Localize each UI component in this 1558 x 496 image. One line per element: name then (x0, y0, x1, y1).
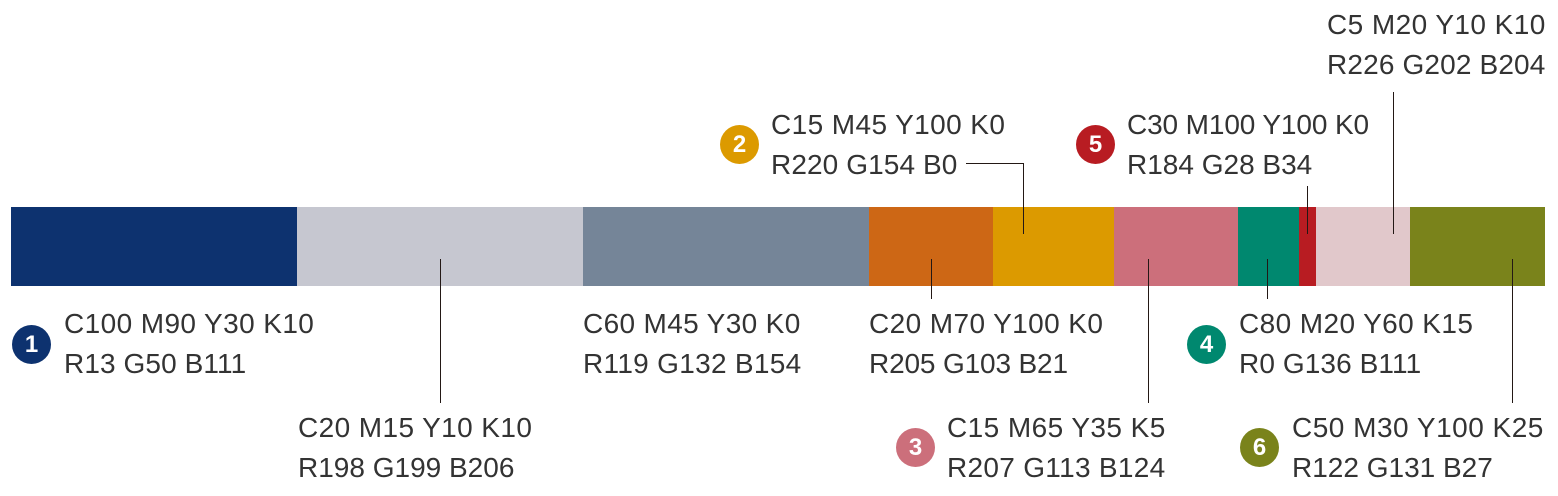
swatch: amber (993, 207, 1114, 286)
swatch: olive (1410, 207, 1545, 286)
swatch: light gray (297, 207, 583, 286)
label: slate values (583, 308, 802, 379)
label: amber values: R220 G154 B0 (771, 149, 957, 180)
leader line: red (1307, 186, 1308, 234)
badge 1 (12, 325, 51, 364)
label: pale pink values: C5 M20 Y10 K10 (1327, 9, 1546, 40)
label: light gray values (298, 412, 532, 483)
label: navy values: R13 G50 B111 (64, 348, 246, 379)
label: pale pink values (1327, 9, 1546, 80)
label: red values: C30 M100 Y100 K0 (1127, 109, 1369, 140)
label: amber values: C15 M45 Y100 K0 (771, 109, 1005, 140)
badge 4 (1187, 325, 1226, 364)
label: navy values: C100 M90 Y30 K10 (64, 308, 314, 339)
label: olive values: C50 M30 Y100 K25 (1292, 412, 1544, 443)
label: rose values (947, 412, 1166, 483)
leader line: light gray (440, 259, 441, 403)
badge 5: 5 (1089, 131, 1102, 158)
badge 6: 6 (1253, 434, 1266, 461)
label: green values (1239, 308, 1473, 379)
badge 1: 1 (25, 331, 38, 358)
leader line: green (1267, 259, 1268, 299)
badge 3: 3 (909, 434, 922, 461)
swatch: pale pink (1316, 207, 1410, 286)
label: orange values: C20 M70 Y100 K0 (869, 308, 1103, 339)
label: light gray values: R198 G199 B206 (298, 452, 514, 483)
badge 6 (1240, 428, 1279, 467)
badge 5 (1076, 125, 1115, 164)
swatch: slate (583, 207, 869, 286)
label: orange values (869, 308, 1103, 379)
leader line: rose (1148, 259, 1149, 403)
leader line: amber (966, 163, 1024, 234)
label: slate values: C60 M45 Y30 K0 (583, 308, 801, 339)
leader line: orange (931, 259, 932, 299)
badge 2 (720, 125, 759, 164)
label: olive values (1292, 412, 1544, 483)
label: pale pink values: R226 G202 B204 (1327, 49, 1546, 80)
swatch: rose (1114, 207, 1238, 286)
label: olive values: R122 G131 B27 (1292, 452, 1493, 483)
leader line: olive (1512, 259, 1513, 403)
label: slate values: R119 G132 B154 (583, 348, 802, 379)
badge 3 (896, 428, 935, 467)
label: green values: R0 G136 B111 (1239, 348, 1421, 379)
label: green values: C80 M20 Y60 K15 (1239, 308, 1473, 339)
label: red values (1127, 109, 1369, 180)
swatch: red (1299, 207, 1316, 286)
label: red values: R184 G28 B34 (1127, 149, 1312, 180)
swatch: orange (869, 207, 993, 286)
swatch: navy (11, 207, 297, 286)
label: navy values (64, 308, 314, 379)
label: orange values: R205 G103 B21 (869, 348, 1068, 379)
label: light gray values: C20 M15 Y10 K10 (298, 412, 532, 443)
label: rose values: R207 G113 B124 (947, 452, 1166, 483)
leader line: pale pink (1393, 92, 1394, 234)
color bar (11, 207, 1545, 286)
badge 2: 2 (733, 131, 746, 158)
label: rose values: C15 M65 Y35 K5 (947, 412, 1166, 443)
label: amber values (771, 109, 1005, 180)
swatch: green (1238, 207, 1299, 286)
badge 4: 4 (1200, 331, 1213, 358)
